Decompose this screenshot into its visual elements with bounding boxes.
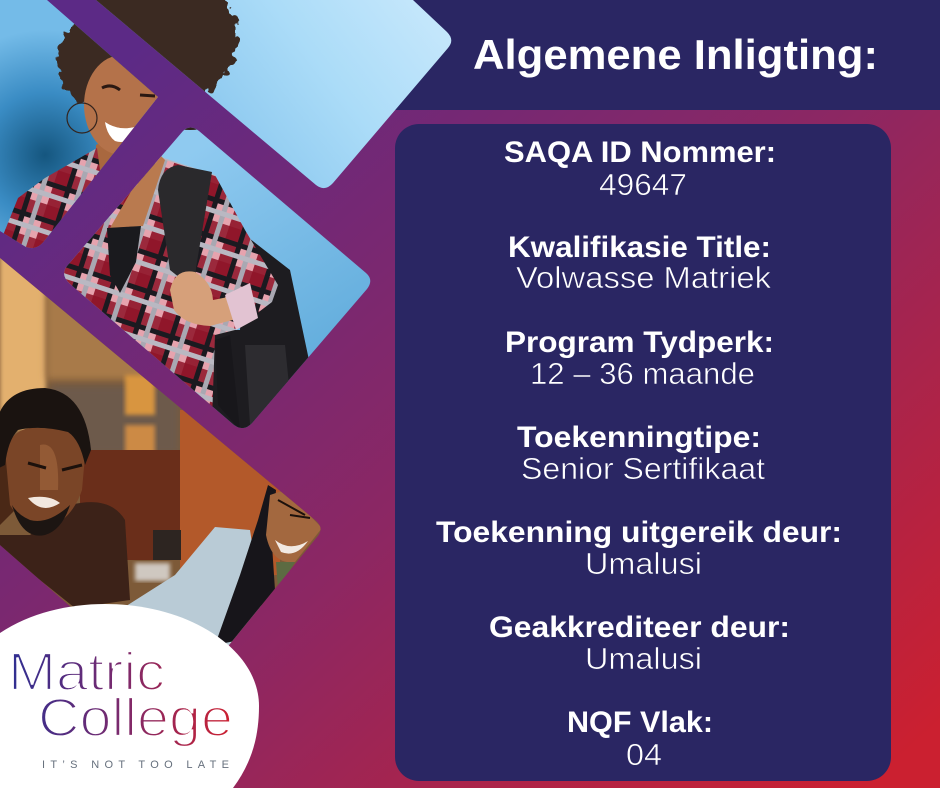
item: awarded by (436, 516, 842, 581)
item: NQF level: 04 (626, 737, 662, 772)
logo wordmark: College: College (38, 688, 233, 748)
hand and forearm (170, 271, 240, 326)
item: program duration: 12 – 36 maande (530, 356, 755, 391)
item: awarded by: Umalusi (585, 546, 702, 581)
shirt cuff (225, 283, 258, 330)
header band (395, 0, 940, 110)
item: qualification title: Kwalifikasie Title: (508, 231, 771, 264)
item: NQF level (567, 706, 713, 772)
panel: general information (395, 124, 891, 781)
earring (67, 103, 97, 133)
item: NQF level: NQF Vlak: (567, 706, 713, 739)
photo: sky and hair, top right (96, 0, 452, 188)
title: Algemene Inligting: (473, 31, 878, 78)
shirt (55, 155, 278, 420)
photo: woman with backpack, centre (64, 128, 370, 428)
item: accredited by: Geakkrediteer deur: (489, 611, 790, 644)
item: award type (517, 421, 765, 486)
item: award type: Senior Sertifikaat (521, 451, 765, 486)
item: SAQA ID: SAQA ID Nommer: (504, 136, 776, 169)
man (0, 388, 130, 608)
neck and chest (110, 150, 165, 228)
backpack strap (158, 165, 212, 276)
item: award type: Toekenningtipe: (517, 421, 761, 454)
logo tagline: IT’S NOT TOO LATE (42, 759, 229, 771)
photo: smiling woman's face, left (0, 0, 158, 248)
logo badge (0, 604, 259, 788)
backpack (202, 239, 308, 428)
item: accredited by (489, 611, 790, 676)
woman with braids (120, 485, 322, 650)
item: program duration (505, 326, 774, 391)
item: qualification title: Volwasse Matriek (516, 260, 772, 295)
item: SAQA ID: 49647 (599, 167, 687, 202)
item: qualification title (508, 231, 772, 295)
item: SAQA ID (504, 136, 776, 202)
item: program duration: Program Tydperk: (505, 326, 774, 359)
item: awarded by: Toekenning uitgereik deur: (436, 516, 842, 549)
photo: two students, bottom (0, 250, 330, 655)
black top (107, 226, 141, 293)
shirt (4, 148, 100, 248)
item: accredited by: Umalusi (585, 641, 702, 676)
logo wordmark: Matric: Matric (8, 642, 165, 702)
